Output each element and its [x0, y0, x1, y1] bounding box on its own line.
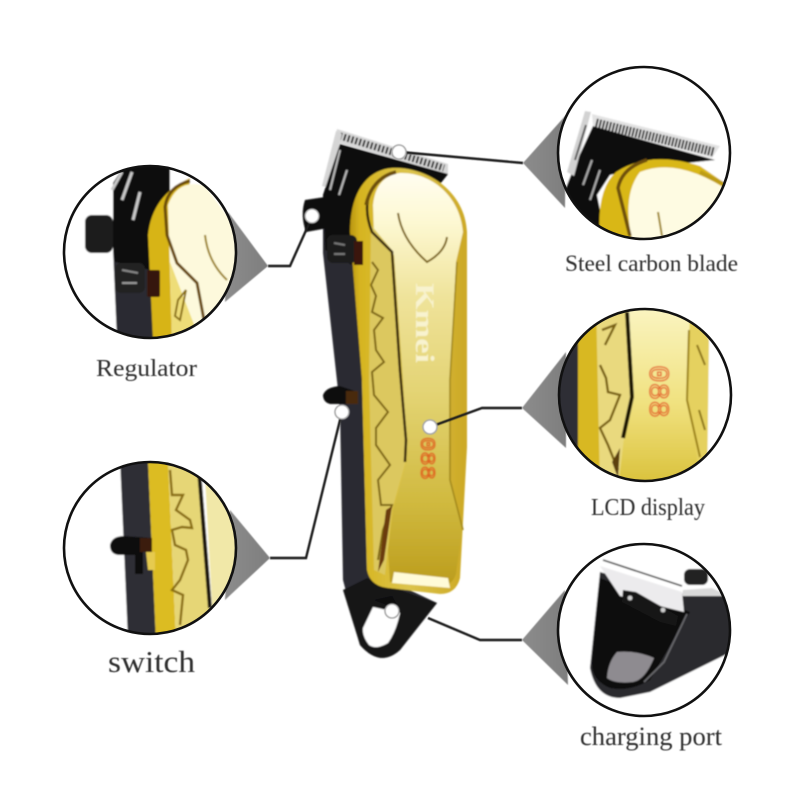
pointer triangle [522, 352, 566, 448]
bottom highlight [392, 572, 450, 588]
brand name: Kmei [410, 283, 439, 363]
product: gold hair clipper [303, 129, 467, 658]
callout: LCD display [522, 300, 740, 521]
charging stand zoom illustration [559, 558, 729, 699]
label: Steel carbon blade [565, 251, 738, 276]
circle outline [558, 67, 730, 239]
switch zoom illustration [109, 463, 235, 633]
clipper blade [322, 129, 448, 188]
callout: steel carbon blade [523, 60, 740, 276]
blade zoom illustration [559, 110, 724, 238]
clipper bright face [373, 173, 463, 586]
callout: switch [60, 460, 270, 679]
clipper gold body [350, 168, 467, 594]
LCD zoom illustration [560, 310, 710, 480]
label: charging port [580, 722, 723, 751]
infographic canvas [62, 66, 738, 752]
circle outline [64, 462, 236, 634]
pointer triangle [225, 510, 270, 600]
label: Regulator [96, 356, 197, 382]
clipper dark contour lines [367, 195, 463, 530]
LCD zoom illustration: 088 [641, 365, 672, 418]
pointer triangle [523, 115, 566, 208]
regulator zoom illustration [84, 167, 235, 337]
circle outline [559, 309, 731, 481]
circle outline [64, 166, 236, 338]
regulator knobs [303, 197, 363, 265]
clipper black handle [323, 144, 448, 658]
pointer triangle [225, 212, 268, 302]
label: LCD display [591, 495, 705, 521]
callout: charging port [522, 535, 740, 751]
callout: regulator [60, 160, 268, 382]
connector lines [268, 152, 523, 640]
clipper left engraved strip [369, 225, 406, 575]
callout dots [305, 145, 437, 618]
label: switch [108, 644, 196, 679]
engraved zigzag pattern [371, 262, 392, 560]
clipper top-left brown edge [366, 172, 396, 205]
LCD digits: 088 [414, 437, 437, 480]
pointer triangle [522, 590, 568, 685]
switch knob [323, 386, 358, 404]
circle outline [558, 544, 730, 716]
clipper hanging loop hole [363, 607, 400, 647]
